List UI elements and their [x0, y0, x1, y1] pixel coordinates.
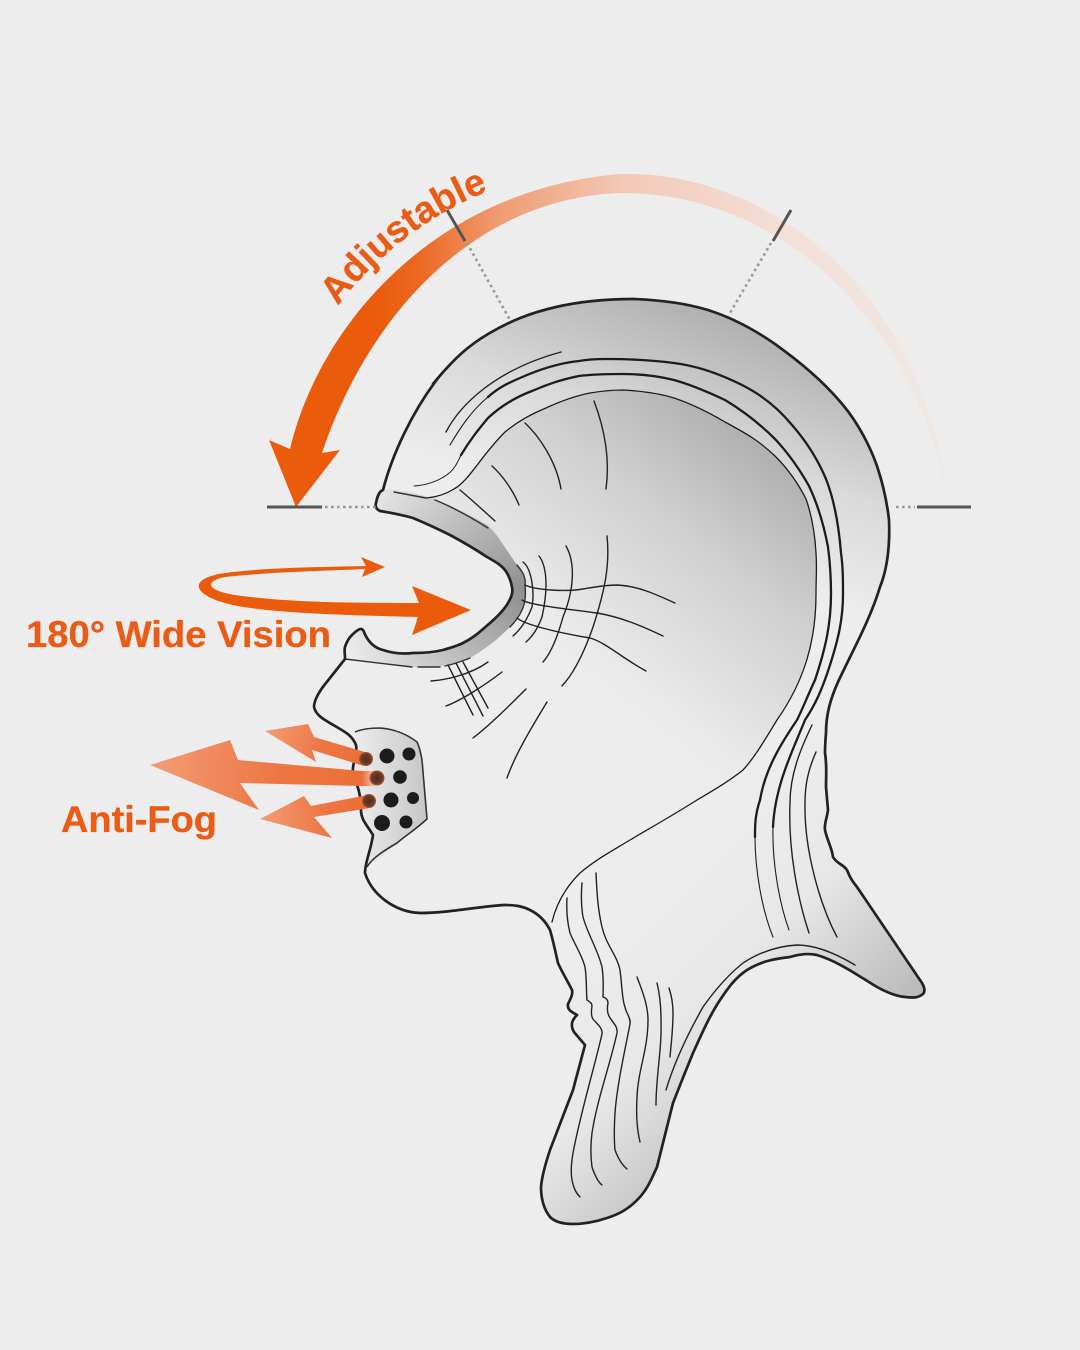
eye trim band [345, 489, 525, 667]
label: Anti-Fog: Anti-Fog [61, 799, 217, 840]
neck folds [567, 725, 855, 1197]
vent panel edge [355, 728, 427, 867]
vent panel fill [354, 728, 427, 867]
neck shading [542, 870, 923, 1222]
mask outline [314, 299, 924, 1224]
vent holes [374, 748, 419, 831]
adjustable arc arrow [269, 174, 947, 507]
hood fill [314, 299, 924, 1224]
inner face shading [446, 390, 816, 744]
seam lines [414, 359, 843, 937]
anti-fog arrows [150, 724, 384, 838]
adjustable position markers [267, 210, 971, 507]
label: 180° Wide Vision: 180° Wide Vision [26, 614, 331, 655]
band thin edges [345, 492, 525, 667]
label: Adjustable: Adjustable [324, 175, 486, 306]
infographic: balaclava mask side view [28, 174, 971, 1226]
mask [314, 299, 940, 1240]
wrinkles [431, 352, 675, 778]
wide vision arrow [199, 557, 471, 635]
